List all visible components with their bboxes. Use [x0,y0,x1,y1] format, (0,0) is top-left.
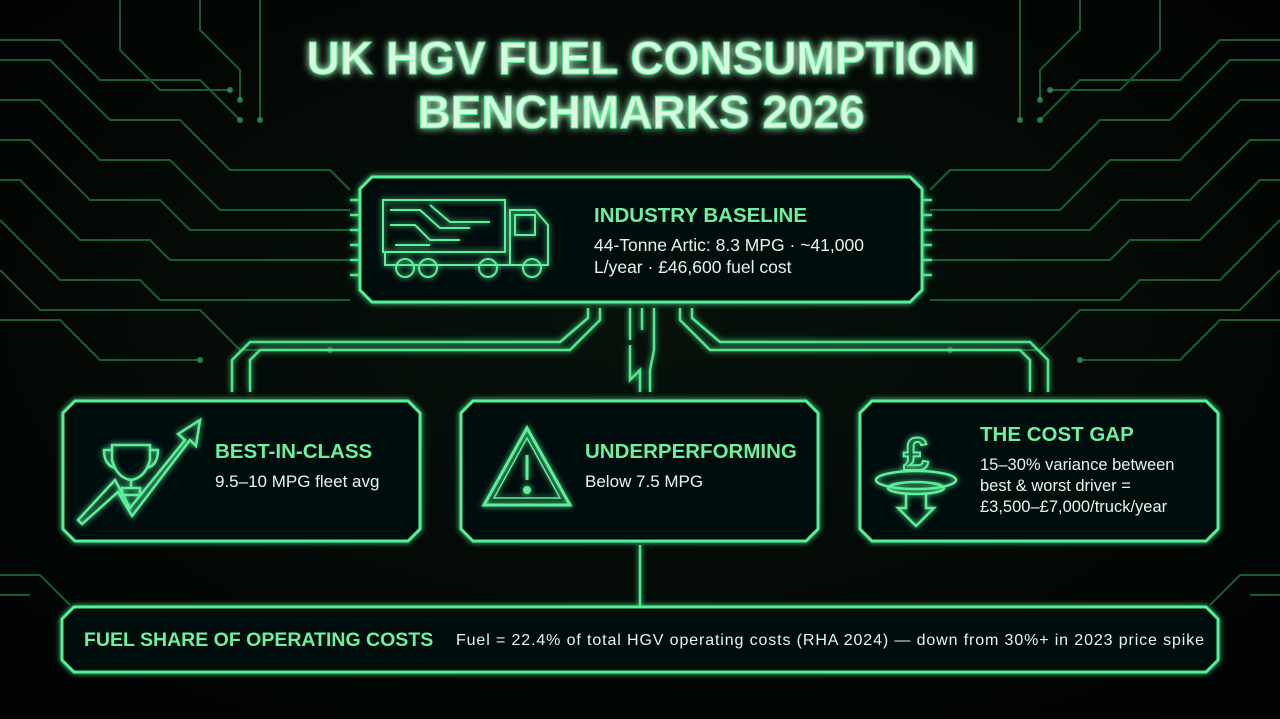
icon: pound vortex: £ [903,428,929,480]
panel: best-in-class [63,401,420,541]
text: best-in-class: 9.5–10 MPG fleet avg [215,472,379,491]
text: cost gap: £3,500–£7,000/truck/year [980,498,1168,516]
panel: industry baseline [360,177,922,302]
connectors [232,200,1048,608]
heading: industry baseline: INDUSTRY BASELINE [594,204,807,227]
heading: cost gap: THE COST GAP [980,423,1134,446]
icon: pound vortex [876,428,956,526]
heading: fuel share: FUEL SHARE OF OPERATING COSTS [84,629,433,651]
text: cost gap: best & worst driver = [980,477,1131,495]
panel: cost gap [860,401,1218,541]
panel: underperforming [461,401,818,541]
icon: warning [484,428,570,505]
title [307,32,975,138]
title: UK HGV FUEL CONSUMPTION [307,32,975,84]
text: baseline stats: 44-Tonne Artic: 8.3 MPG · ~41,000 [594,235,864,255]
panel: fuel share [62,607,1218,672]
text: cost gap: 15–30% variance between [980,456,1174,474]
heading: underperforming: UNDERPERFORMING [585,440,797,463]
icon: truck [383,200,548,277]
text: fuel share: Fuel = 22.4% of total HGV operating costs (RHA 2024) — down from 30%+ in 2023 price spike [456,632,1204,649]
heading: best-in-class: BEST-IN-CLASS [215,440,372,463]
text: baseline stats: L/year · £46,600 fuel cost [594,257,792,277]
title: BENCHMARKS 2026 [417,86,865,138]
icon: trophy arrow [78,420,200,524]
text: underperforming: Below 7.5 MPG [585,472,703,491]
